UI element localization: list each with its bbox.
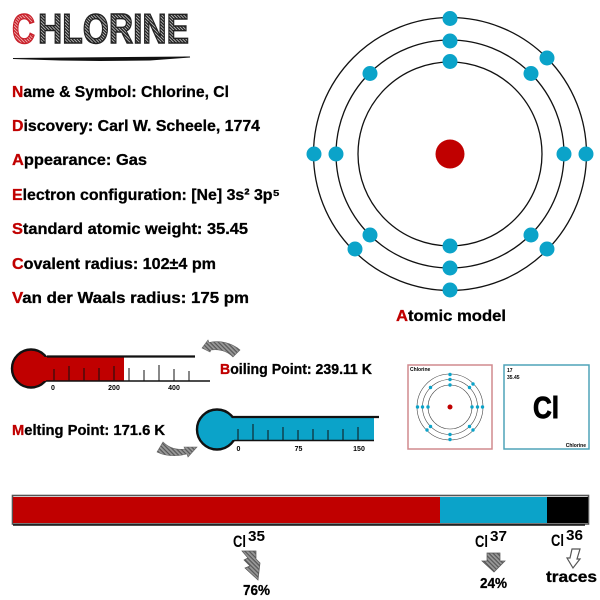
label: Cl35 (233, 528, 265, 551)
fact: electron configuration: Electron configuration: [Ne] 3s² 3p⁵ (12, 187, 280, 204)
fact: van der waals radius: Van der Waals radius: 175 pm (12, 290, 249, 307)
text block: element facts (12, 84, 280, 307)
boiling point thermometer: 400 (168, 385, 180, 392)
boiling point thermometer: 200 (108, 385, 120, 392)
label: Cl36 (551, 527, 583, 550)
value: 24%: 24% (480, 575, 507, 592)
arrow: boiling point (202, 340, 240, 357)
boiling point thermometer: 0 (51, 385, 55, 392)
melting point label: Melting Point: 171.6 K (12, 422, 165, 439)
card: periodic table cell (504, 365, 589, 449)
fact: discovery: Discovery: Carl W. Scheele, 1774 (12, 118, 260, 135)
melting point thermometer (197, 410, 379, 453)
value: traces: traces (546, 569, 597, 586)
isotope abundance bar (12, 496, 588, 525)
melting point thermometer: 150 (353, 446, 365, 453)
title: HLORINE (38, 5, 189, 52)
title underline (13, 57, 190, 60)
melting point thermometer: 0 (237, 446, 241, 453)
electrons (306, 11, 594, 298)
label: Cl37 (475, 528, 507, 551)
card: periodic table cell: 17 (507, 368, 513, 374)
melting point thermometer: 75 (295, 446, 302, 453)
card: periodic table cell: Chlorine (566, 443, 586, 449)
fact: atomic weight: Standard atomic weight: 35.45 (12, 221, 248, 238)
arrow: Cl35 to 76% (242, 551, 260, 580)
fact: appearance: Appearance: Gas (12, 152, 147, 169)
label: Cl35: 35 (248, 528, 265, 545)
arrow: Cl36 to traces (567, 549, 580, 568)
card: atom thumbnail (408, 365, 492, 449)
label: Cl35: Cl (233, 533, 246, 551)
arrow: melting point (157, 442, 197, 457)
atomic model caption: Atomic model (396, 308, 506, 325)
fact: covalent radius: Covalent radius: 102±4 pm (12, 256, 216, 273)
card: periodic table cell: 35.45 (507, 375, 520, 381)
arrow: Cl37 to 24% (482, 553, 505, 572)
card: periodic table cell: Cl (533, 390, 559, 425)
label: Cl36: 36 (566, 527, 583, 544)
value: 76%: 76% (243, 582, 270, 599)
label: Cl37: 37 (490, 528, 507, 545)
fact: name and symbol: Name & Symbol: Chlorine, Cl (12, 84, 229, 101)
card: atom thumbnail: Chlorine (410, 367, 430, 373)
title: C (12, 5, 35, 52)
boiling point thermometer (12, 350, 210, 392)
nucleus (436, 140, 464, 168)
boiling point label: Boiling Point: 239.11 K (220, 361, 372, 378)
atomic model diagram (306, 11, 594, 298)
label: Cl37: Cl (475, 533, 488, 551)
label: Cl36: Cl (551, 532, 564, 550)
